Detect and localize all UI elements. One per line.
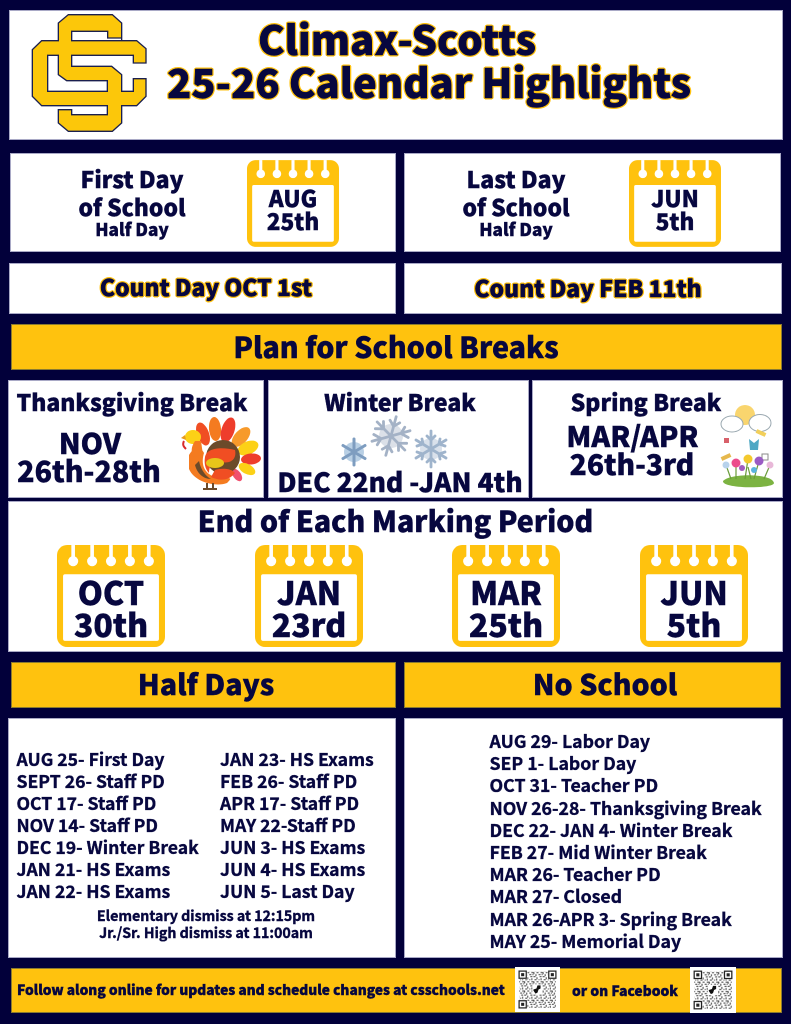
thanksgiving heading: Thanksgiving Break bbox=[16, 384, 248, 418]
panel: thanksgiving break bbox=[8, 380, 264, 498]
no school dates: NOV 26-28- Thanksgiving Break bbox=[490, 795, 762, 821]
no school dates: MAY 25- Memorial Day bbox=[490, 928, 681, 954]
qr code: website bbox=[515, 967, 560, 1012]
winter dates: DEC 22nd -JAN 4th bbox=[277, 461, 523, 500]
icon: calendar Oct 30th bbox=[57, 545, 165, 647]
title line 1: Climax-Scotts bbox=[258, 9, 536, 67]
panel: count day October bbox=[9, 263, 396, 314]
half days column one: OCT 17- Staff PD bbox=[16, 791, 156, 816]
spring date range: 26th-3rd bbox=[570, 443, 694, 484]
icon: calendar Jun 5th: JUN bbox=[651, 181, 699, 214]
spring heading: Spring Break bbox=[571, 384, 721, 418]
heading band: no school: No School bbox=[533, 663, 677, 704]
dismissal times note: Elementary dismiss at 12:15pm bbox=[97, 906, 315, 926]
icon: calendar Jan 23rd: JAN bbox=[277, 569, 341, 615]
icon: calendar Oct 30th: 30th bbox=[74, 601, 148, 647]
icon: calendar Aug 25th: 25th bbox=[267, 204, 319, 237]
no school dates: FEB 27- Mid Winter Break bbox=[490, 839, 707, 865]
heading band: half days bbox=[11, 662, 396, 708]
icon: turkey bbox=[181, 417, 261, 490]
half days column one: SEPT 26- Staff PD bbox=[16, 769, 165, 794]
panel: winter break bbox=[268, 380, 529, 498]
half days column one: AUG 25- First Day bbox=[16, 746, 164, 772]
count day text: Count Day OCT 1st bbox=[100, 270, 312, 303]
footer facebook text: or on Facebook bbox=[572, 980, 678, 1000]
icon: calendar Jun 5th: JUN bbox=[660, 569, 728, 615]
icon: calendar Oct 30th: OCT bbox=[78, 569, 144, 615]
panel: half days list bbox=[8, 718, 396, 958]
heading band: no school bbox=[404, 662, 781, 708]
icon: calendar Jun 5th: 5th bbox=[656, 204, 694, 237]
icon: calendar Jan 23rd bbox=[255, 545, 363, 647]
panel: no school list bbox=[404, 718, 783, 958]
no school dates: MAR 27- Closed bbox=[490, 883, 622, 909]
panel: first day of school bbox=[10, 153, 396, 252]
qr code: facebook bbox=[690, 967, 736, 1013]
no school dates: OCT 31- Teacher PD bbox=[490, 772, 658, 798]
dismissal times note bbox=[97, 906, 315, 942]
first day label: First Day bbox=[80, 161, 184, 195]
icon: calendar Aug 25th bbox=[247, 160, 339, 247]
of school label: of School bbox=[462, 190, 570, 223]
thanksgiving date range: 26th-28th bbox=[17, 450, 161, 491]
thanksgiving dates: NOV bbox=[59, 422, 121, 463]
no school dates: DEC 22- JAN 4- Winter Break bbox=[490, 817, 732, 843]
no school dates: SEP 1- Labor Day bbox=[490, 750, 636, 776]
half days column one: NOV 14- Staff PD bbox=[16, 813, 158, 838]
panel: last day of school bbox=[404, 153, 781, 252]
half days column two: FEB 26- Staff PD bbox=[220, 769, 357, 794]
of school label: of School bbox=[78, 190, 186, 223]
icon: sun clouds and flowers bbox=[720, 405, 774, 488]
icon: calendar Jan 23rd: 23rd bbox=[272, 601, 346, 647]
title line 2: 25-26 Calendar Highlights bbox=[167, 52, 691, 110]
icon: snowflakes bbox=[341, 415, 448, 468]
half days column two: JAN 23- HS Exams bbox=[220, 746, 374, 772]
count day text: Count Day FEB 11th bbox=[474, 270, 702, 304]
no school dates: AUG 29- Labor Day bbox=[490, 728, 650, 754]
icon: calendar Jun 5th bbox=[629, 160, 721, 247]
header panel bbox=[9, 10, 783, 140]
logo: SC monogram bbox=[32, 14, 147, 132]
half days column two bbox=[220, 746, 374, 904]
heading band: plan for school breaks: Plan for School Breaks bbox=[233, 326, 559, 367]
icon: calendar Jun 5th: 5th bbox=[667, 601, 721, 647]
half days column two: APR 17- Staff PD bbox=[220, 791, 359, 816]
no school dates: MAR 26-APR 3- Spring Break bbox=[490, 906, 732, 932]
heading band: half days: Half Days bbox=[138, 663, 274, 704]
half day note: Half Day bbox=[95, 216, 169, 241]
footer website text: Follow along online for updates and schedule changes at csschools.net bbox=[17, 979, 505, 999]
footer band bbox=[11, 968, 782, 1013]
marking period heading: End of Each Marking Period bbox=[198, 500, 593, 541]
last day label: Last Day bbox=[466, 161, 566, 195]
icon: calendar Mar 25th: 25th bbox=[469, 601, 543, 647]
panel: end of each marking period bbox=[8, 501, 783, 652]
half days column one: JAN 22- HS Exams bbox=[16, 879, 170, 904]
half days column two: JUN 5- Last Day bbox=[220, 879, 355, 904]
icon: calendar Mar 25th: MAR bbox=[470, 569, 542, 615]
half days column two: JUN 4- HS Exams bbox=[220, 857, 365, 882]
half days column one: DEC 19- Winter Break bbox=[16, 835, 199, 860]
no school dates: MAR 26- Teacher PD bbox=[490, 861, 661, 887]
icon: calendar Aug 25th: AUG bbox=[269, 181, 317, 214]
icon: calendar Jun 5th bbox=[640, 545, 748, 647]
icon: calendar Mar 25th bbox=[452, 545, 560, 647]
half day note: Half Day bbox=[479, 216, 553, 241]
spring dates month: MAR/APR bbox=[566, 415, 699, 456]
panel: count day February bbox=[404, 263, 782, 314]
half days column two: JUN 3- HS Exams bbox=[220, 835, 365, 860]
half days column one: JAN 21- HS Exams bbox=[16, 857, 170, 882]
half days column two: MAY 22-Staff PD bbox=[220, 813, 356, 838]
no school dates bbox=[489, 728, 762, 954]
heading band: plan for school breaks bbox=[11, 324, 782, 370]
dismissal times note: Jr./Sr. High dismiss at 11:00am bbox=[99, 922, 313, 942]
panel: spring break bbox=[532, 380, 783, 498]
winter heading: Winter Break bbox=[324, 384, 476, 418]
half days column one bbox=[16, 746, 199, 904]
